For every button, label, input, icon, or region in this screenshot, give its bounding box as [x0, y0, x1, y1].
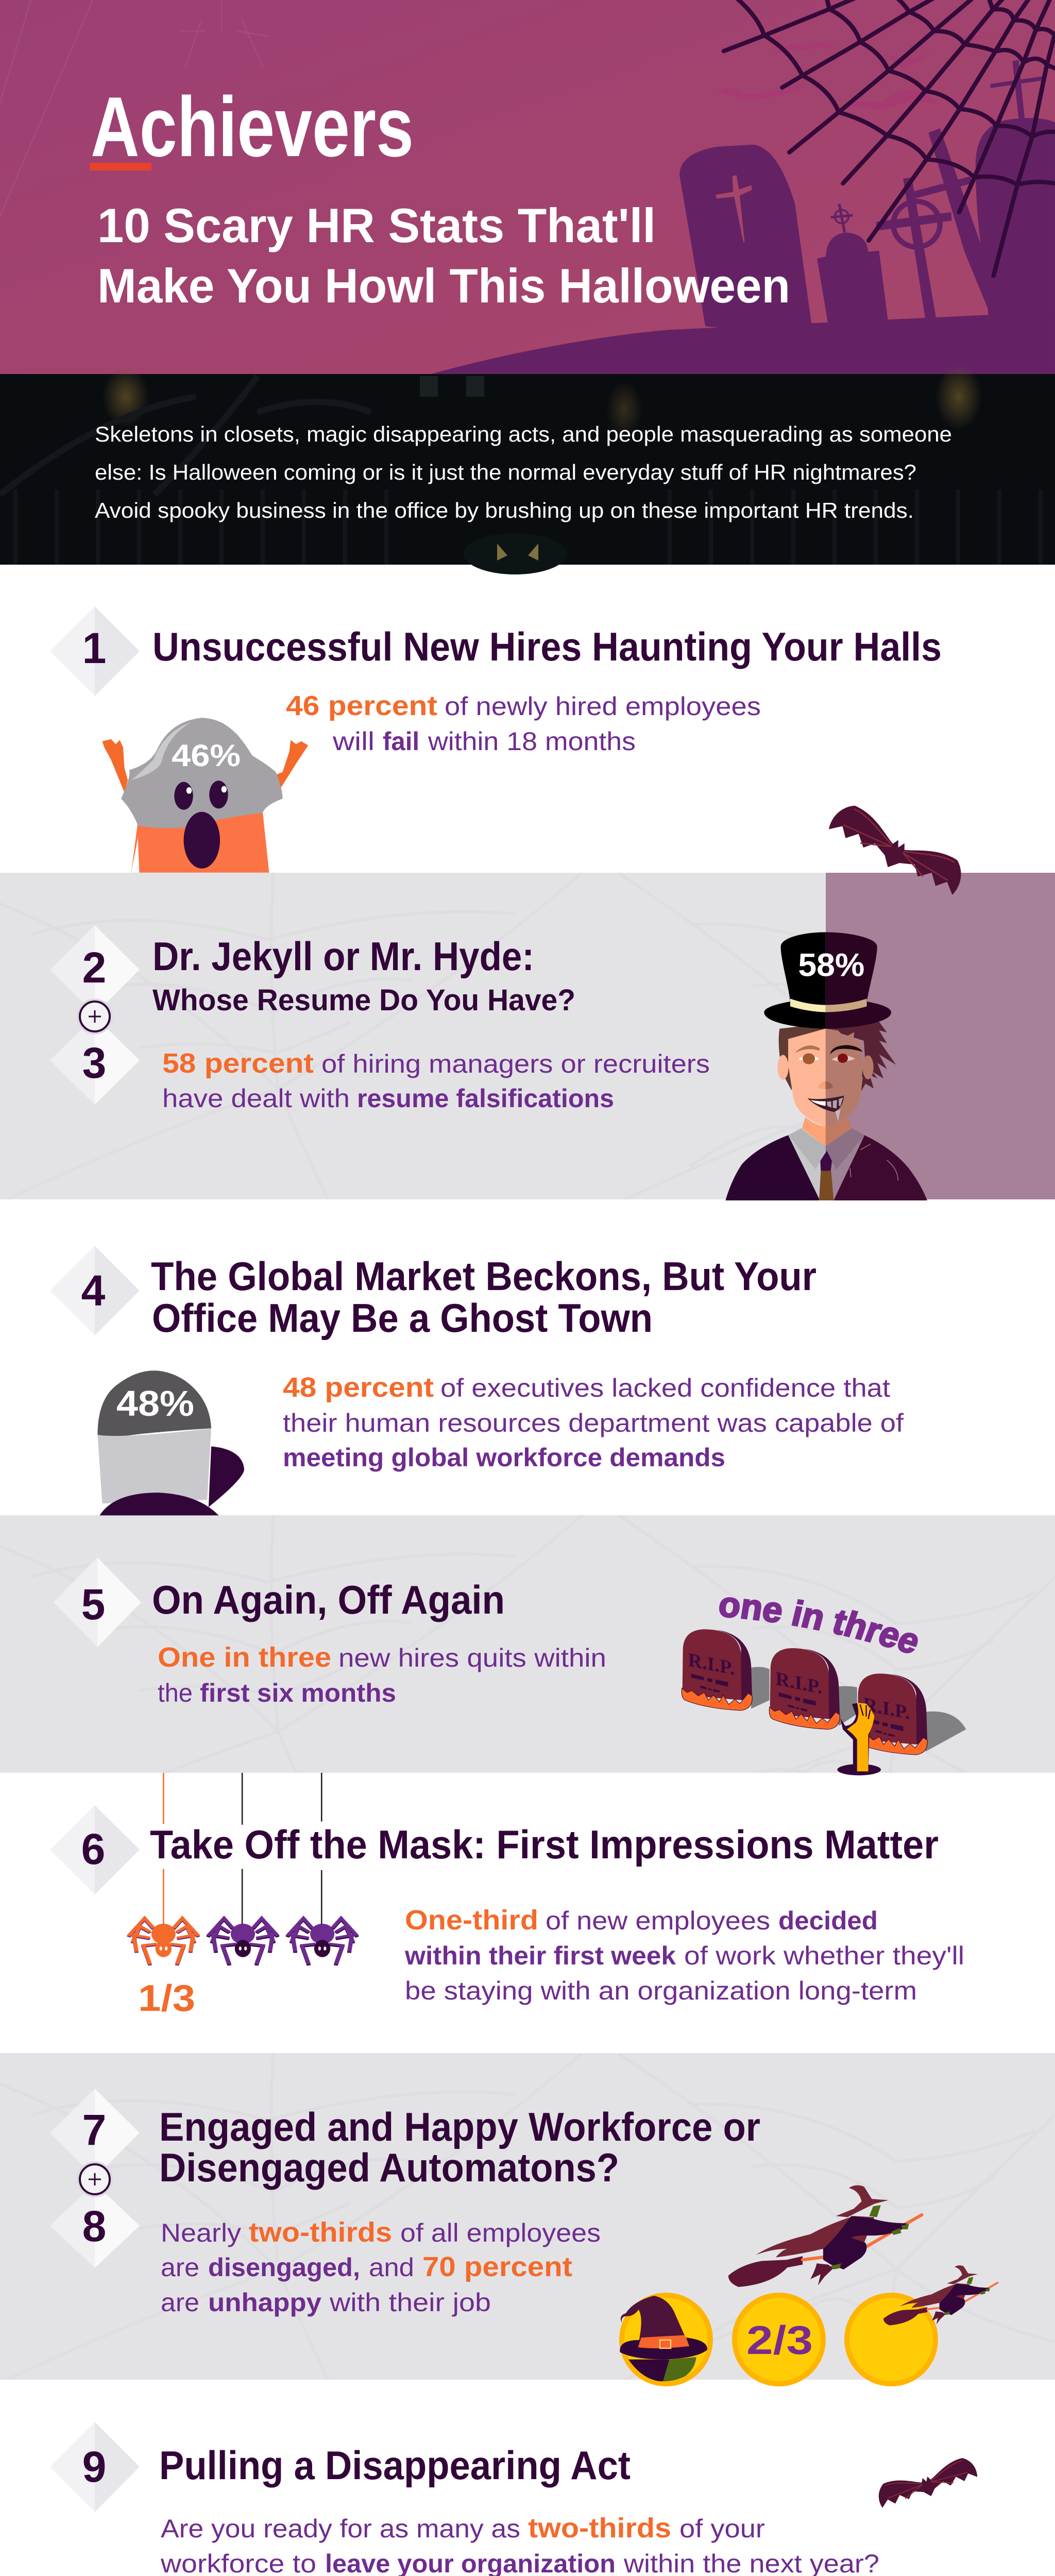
logo: Achievers: Achievers [91, 79, 414, 174]
stat text: of work whether they'll [684, 1941, 964, 1970]
panel: stat 6 first impressions [0, 1773, 1055, 2053]
number badge 2: 2 [82, 943, 106, 992]
icon: ghost 46%: 46% [172, 738, 241, 773]
intro text: Skeletons in closets, magic disappearing acts, and people masquerading as someone [95, 422, 952, 446]
icon: ghost figure 48% [97, 1370, 244, 1515]
icon: three spiders: 1/3 [138, 1978, 195, 2019]
stat text: of all employees [400, 2218, 601, 2247]
icon: Jekyll and Hyde man [725, 932, 927, 1200]
number badge 3: 3 [82, 1039, 106, 1087]
heading: Pulling a Disappearing Act [159, 2443, 631, 2488]
plus icon [77, 998, 113, 1035]
intro band [0, 363, 1055, 574]
hat label 58%: 58% [798, 947, 864, 983]
stat text: of newly hired employees [445, 692, 761, 721]
number badge 1: 1 [82, 624, 106, 672]
panel: stats 7 and 8 disengaged workforce [0, 2053, 1055, 2386]
stat text: Are you ready for as many as [161, 2514, 520, 2543]
intro text: Avoid spooky business in the office by brushing up on these important HR trends. [95, 498, 914, 522]
stat text: One in three [158, 1642, 331, 1673]
stat text: the [158, 1679, 193, 1707]
icon: bat [825, 799, 969, 901]
graveyard silhouette [424, 33, 1055, 376]
panel: stats 2 and 3 resume falsification [0, 799, 1055, 1202]
number badge 9 [50, 2422, 140, 2512]
panel: stat 1 new hires [50, 606, 942, 873]
heading: Disengaged Automatons? [159, 2145, 619, 2190]
stat text [283, 1372, 904, 1472]
stat text: fail [383, 727, 419, 756]
arched label: one in three [719, 1597, 918, 1653]
icon: flying witches [728, 2185, 998, 2325]
title: Make You Howl This Halloween [97, 259, 790, 313]
stat text: decided [778, 1906, 878, 1935]
stat text: 46 percent [286, 690, 437, 721]
stat text: their human resources department was capable of [283, 1409, 904, 1437]
stat text [158, 1642, 606, 1707]
stat text: are [161, 2253, 199, 2282]
stat text: of hiring managers or recruiters [321, 1049, 710, 1078]
heading [151, 1253, 816, 1341]
stat text: Nearly [161, 2218, 241, 2247]
stat text: unhappy [208, 2288, 321, 2317]
title: 10 Scary HR Stats That'll [97, 198, 656, 252]
stat text: disengaged, [208, 2253, 360, 2282]
stat text: with their job [329, 2288, 491, 2317]
number badge 7 [50, 2089, 140, 2177]
stat text: within 18 months [428, 727, 636, 756]
number badge 1 [50, 606, 140, 696]
number badge 6: 6 [81, 1825, 105, 1873]
stat text [286, 690, 761, 756]
stat text [162, 1048, 710, 1113]
stat text: of your [679, 2514, 765, 2543]
stat text: new hires quits within [338, 1643, 606, 1672]
stat text [161, 2217, 601, 2317]
number badge 3 [50, 1016, 140, 1105]
icon: three spiders [128, 1773, 357, 2019]
number badge 6 [50, 1805, 140, 1894]
stat text: meeting global workforce demands [283, 1443, 725, 1472]
heading: On Again, Off Again [152, 1577, 505, 1622]
stat text: have dealt with [162, 1084, 350, 1113]
stat text [404, 1905, 964, 2005]
stat text: resume falsifications [357, 1084, 614, 1113]
heading: Dr. Jekyll or Mr. Hyde: [152, 934, 534, 979]
heading: Whose Resume Do You Have? [152, 984, 575, 1017]
stat text: are [161, 2288, 199, 2317]
number badge 9: 9 [82, 2443, 106, 2491]
number badge 7: 7 [82, 2106, 106, 2154]
stat text: within their first week [404, 1941, 676, 1970]
icon row: witch hat, 2/3, moon: 2/3 [746, 2317, 813, 2363]
number badge 5: 5 [81, 1580, 105, 1629]
stat text: and [369, 2253, 414, 2282]
heading: Take Off the Mask: First Impressions Matter [150, 1822, 939, 1867]
stat text: of new employees [546, 1906, 770, 1935]
intro text [95, 422, 952, 522]
heading [159, 2104, 760, 2190]
stat text: 58 percent [162, 1048, 314, 1079]
heading: The Global Market Beckons, But Your [151, 1253, 816, 1299]
icon row: witch hat, 2/3, moon [619, 2293, 938, 2386]
stat text: two-thirds [249, 2217, 392, 2248]
stat text: of executives lacked confidence that [440, 1374, 890, 1402]
heading: Engaged and Happy Workforce or [159, 2104, 760, 2149]
number badge 4: 4 [81, 1266, 106, 1315]
heading: Unsuccessful New Hires Haunting Your Halls [152, 624, 942, 669]
stat text: will [332, 727, 375, 756]
panel: stat 5 on again off again [0, 1515, 1055, 1775]
number badge 8 [50, 2183, 140, 2268]
hero banner [0, 0, 1055, 376]
number badge 8: 8 [82, 2202, 106, 2250]
stat text: 70 percent [422, 2251, 572, 2282]
number badge 4 [50, 1246, 140, 1335]
number badge 5 [54, 1557, 141, 1647]
stat text: first six months [200, 1679, 396, 1707]
icon: ghost figure 48%: 48% [116, 1383, 194, 1423]
panel: stat 4 global market [0, 1199, 1055, 1515]
heading: Office May Be a Ghost Town [152, 1295, 653, 1341]
icon: bat [875, 2455, 979, 2512]
icon: ghost 46% [103, 718, 308, 873]
stat text: be staying with an organization long-term [405, 1976, 917, 2005]
heading [152, 934, 575, 1017]
stat text: One-third [405, 1905, 538, 1936]
spider web [724, 0, 1055, 276]
number badge 2 [50, 925, 140, 1014]
title [97, 198, 790, 313]
stat text [160, 2513, 879, 2576]
stat text: two-thirds [528, 2513, 671, 2544]
stat text: 48 percent [283, 1372, 434, 1403]
icon: tombstones with hand [681, 1597, 966, 1775]
intro text: else: Is Halloween coming or is it just the normal everyday stuff of HR nightmares? [95, 460, 916, 484]
panel: stat 9 disappearing act [0, 2380, 1055, 2576]
plus icon [77, 2161, 113, 2197]
